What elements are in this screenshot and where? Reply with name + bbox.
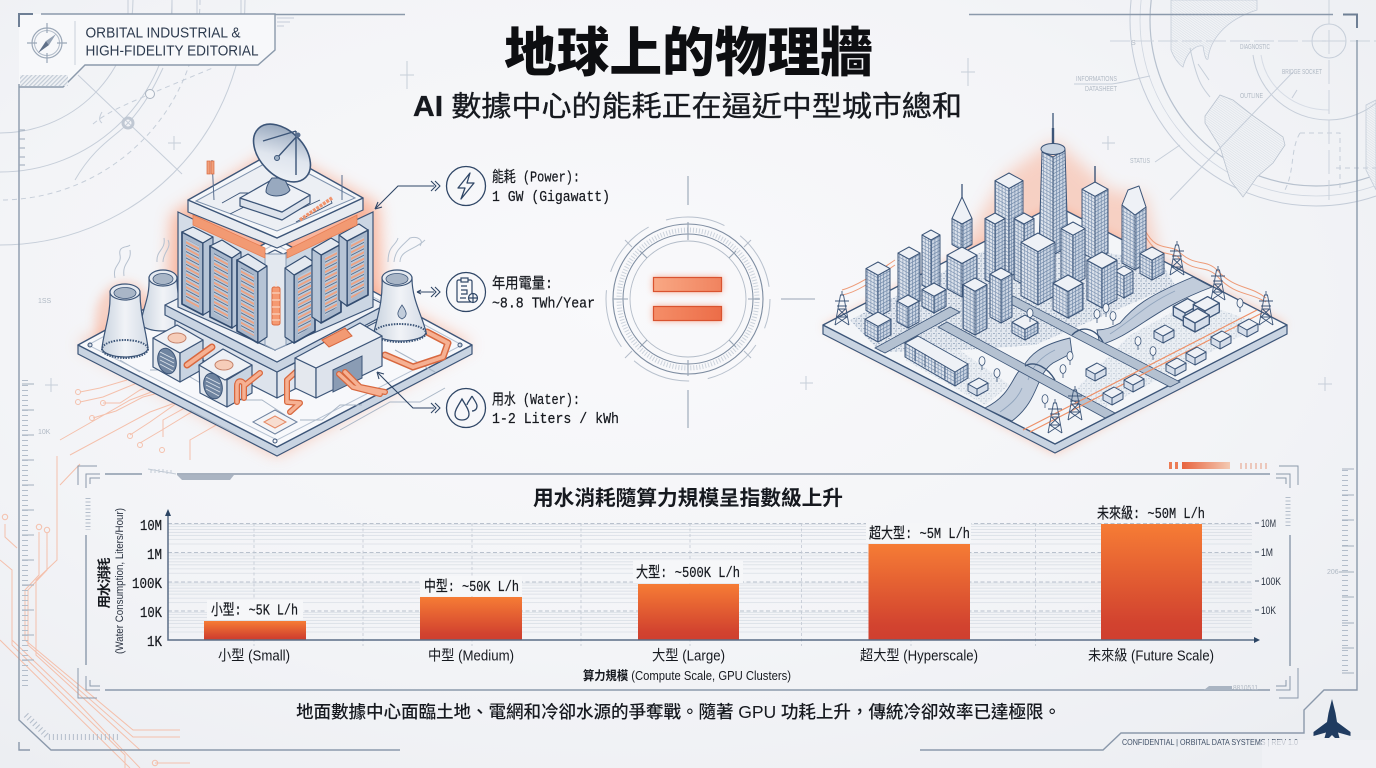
y axis labels: 10M [140, 518, 162, 535]
secondary axis labels [1255, 518, 1282, 617]
globe blueprint, top right [1074, 0, 1376, 206]
x axis title: 算力規模 (Compute Scale, GPU Clusters) [583, 668, 791, 683]
secondary axis labels: 10M [1261, 518, 1276, 530]
antennas [207, 160, 342, 200]
spire tower [1039, 113, 1068, 255]
category labels: 大型 (Large) [652, 648, 725, 664]
globe blueprint, top right: STATUS [1130, 158, 1150, 165]
secondary axis labels: 10K [1261, 605, 1277, 617]
orange glow [78, 150, 472, 455]
orange status column [272, 281, 280, 325]
globe blueprint, top right: DIAGNOSTIC [1240, 44, 1270, 51]
label: power: 1 GW (Gigawatt) [492, 190, 610, 206]
brand text [86, 24, 258, 60]
roads [875, 296, 1180, 418]
dish plinth [240, 178, 310, 220]
arrow: power callout [375, 181, 440, 209]
value labels: 中型: ~50K L/h [424, 578, 519, 596]
globe blueprint, top right: DATASHEET [1085, 86, 1118, 93]
illustration: isometric city [823, 113, 1287, 453]
y axis title: 用水消耗 [96, 557, 112, 608]
server racks, left face [182, 227, 267, 343]
value labels: 未來級: ~50M L/h [1097, 505, 1205, 523]
bridges [1025, 329, 1103, 380]
y axis labels: 10K [140, 605, 162, 622]
category labels: 未來級 (Future Scale) [1088, 648, 1214, 664]
category labels: 超大型 (Hyperscale) [860, 648, 978, 664]
y axis labels: 1M [147, 547, 162, 564]
label: water: 用水 (Water): [492, 391, 580, 409]
dial rings [606, 176, 815, 428]
label: annual energy: 年用電量: [492, 275, 553, 293]
globe blueprint, top right: BRIDGE SOCKET [1282, 69, 1322, 76]
label: annual energy: ~8.8 TWh/Year [492, 296, 595, 312]
bar: hyperscale [868, 544, 970, 640]
equals bars [653, 277, 722, 321]
cooling tower, front left [102, 284, 148, 358]
y axis labels: 1K [147, 634, 162, 651]
outer frame: 1SS [38, 298, 52, 305]
icon: clipboard in circle [446, 272, 486, 312]
river [985, 277, 1212, 421]
blueprint orbit lines, top left [0, 0, 245, 245]
value labels: 超大型: ~5M L/h [869, 525, 970, 543]
icon: lightning in circle [446, 166, 486, 206]
podium deck [165, 250, 385, 372]
icon: jet [1314, 699, 1350, 738]
label: water [492, 391, 619, 428]
steam [114, 237, 425, 278]
bar: small [204, 621, 306, 640]
houses and trees [968, 297, 1258, 408]
globe blueprint, top right: INFORMATIONS [1076, 76, 1117, 83]
label: annual energy [492, 275, 595, 312]
outer frame: 10K [38, 429, 51, 436]
footer meta text: CONFIDENTIAL | ORBITAL DATA SYSTEMS | REV 1.0 [1122, 737, 1298, 747]
tower walls [178, 212, 373, 350]
lower podium [175, 320, 380, 398]
outer frame: 206 [1327, 569, 1339, 576]
axes [165, 509, 1260, 643]
illustration: data center on platform [78, 113, 472, 456]
power lines [842, 230, 1266, 302]
brand text: ORBITAL INDUSTRIAL & [86, 24, 240, 42]
arrow: water callout [377, 372, 440, 413]
cooling fan unit 2 [199, 349, 260, 407]
row houses [905, 336, 968, 386]
label: power: 能耗 (Power): [492, 168, 580, 186]
brand text: HIGH-FIDELITY EDITORIAL [86, 42, 258, 60]
y axis labels [132, 518, 162, 651]
category labels: 小型 (Small) [218, 648, 290, 664]
secondary axis labels: 100K [1261, 576, 1282, 588]
footer statement: 地面數據中心面臨土地、電網和冷卻水源的爭奪戰。隨著 GPU 功耗上升，傳統冷卻效率已達極限。 [296, 702, 1061, 722]
orange bands [193, 215, 357, 258]
y axis title: (Water Consumption, Liters/Hour) [114, 508, 126, 654]
chart panel frame: 8810511 [1233, 685, 1258, 692]
circuit traces, bottom left [0, 380, 250, 768]
base plate [78, 238, 472, 456]
subtitle: AI 數據中心的能耗正在逼近中型城市總和 [413, 90, 962, 122]
chart title: 用水消耗隨算力規模呈指數級上升 [533, 486, 843, 510]
service annex [287, 323, 385, 412]
cooling fan unit 1 [153, 325, 212, 382]
orange accent bar [1169, 462, 1266, 469]
globe blueprint, top right: OUTLINE [1240, 93, 1263, 100]
bar chart [96, 505, 1282, 683]
bar: future scale [1101, 524, 1202, 640]
category labels: 中型 (Medium) [428, 648, 514, 664]
city base [823, 205, 1287, 453]
chip [253, 410, 297, 434]
skyline towers [865, 113, 1164, 342]
icon: water drops in circle [446, 388, 486, 428]
value labels: 小型: ~5K L/h [211, 602, 298, 620]
chart panel frame [78, 462, 1298, 698]
cooling tower, back left [141, 270, 185, 331]
server racks, right face [285, 224, 368, 343]
label: water: 1-2 Liters / kWh [492, 412, 619, 428]
orange coolant pipe, right [385, 332, 448, 367]
category labels [218, 648, 1214, 664]
cooling tower, right [374, 270, 426, 342]
secondary axis labels: 1M [1261, 547, 1273, 559]
arrow: annual energy callout [417, 287, 440, 297]
bars [204, 524, 1202, 640]
y axis labels: 100K [132, 576, 162, 593]
roof [188, 150, 363, 248]
bar: large [638, 584, 739, 640]
satellite dish [243, 113, 321, 193]
label: power [492, 168, 610, 206]
equals sign in dial [606, 176, 815, 428]
orange glow [823, 140, 1287, 453]
orange utility lines [1023, 310, 1262, 432]
globe blueprint, top right: S [1131, 40, 1136, 47]
gridlines [168, 523, 1252, 646]
value labels [207, 505, 1205, 620]
title: 地球上的物理牆 [504, 11, 873, 87]
value labels: 大型: ~500K L/h [636, 564, 740, 582]
logo badge [27, 18, 294, 65]
pylons [835, 241, 1273, 433]
bar: medium [420, 597, 522, 640]
y axis title [96, 508, 126, 654]
icon: compass [27, 23, 67, 63]
